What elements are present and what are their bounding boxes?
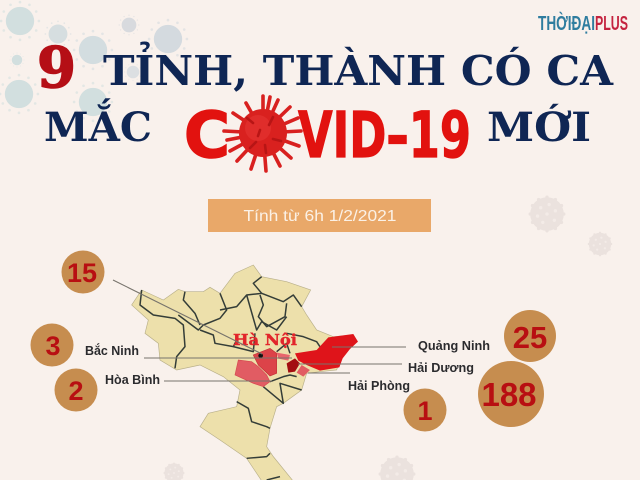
case count: 188: 188 — [481, 376, 537, 413]
logo: Thời Đại Plus: THỜIĐẠI — [538, 11, 595, 35]
title number 9: 9 — [37, 35, 76, 101]
letter C: C — [184, 99, 230, 172]
case count: 3: 3 — [45, 331, 61, 361]
map label: Hà Nội: Hà Nội — [233, 331, 297, 349]
icon: red virus as letter O — [224, 96, 301, 171]
province: Hà Nội — [253, 348, 277, 376]
case count: 1: 1 — [417, 396, 433, 426]
province: Bắc Ninh — [277, 353, 290, 361]
province borders — [140, 277, 320, 480]
province: Hòa Bình — [235, 360, 270, 387]
case count: 25 — [504, 310, 556, 362]
place labels: Bắc Ninh — [85, 343, 139, 358]
title line 1: TỈNH, THÀNH CÓ CA — [103, 42, 614, 95]
case count: 25: 25 — [513, 320, 547, 355]
leader lines — [113, 280, 406, 381]
place labels: Quảng Ninh — [418, 339, 490, 353]
case count: 15 — [62, 250, 104, 294]
case count: 2 — [54, 368, 98, 412]
background virus decoration: right and bottom — [163, 196, 612, 480]
marker: Hà Nội black dot — [258, 353, 263, 358]
case count: 1 — [404, 388, 446, 432]
place labels: Hòa Bình — [105, 373, 160, 387]
province: Hải Dương — [287, 358, 300, 373]
case count: 3 — [30, 324, 74, 366]
text VID-19: VID–19 — [298, 99, 471, 172]
place labels: Hải Dương — [408, 361, 474, 375]
title — [37, 35, 614, 151]
COVID-19 wordmark — [184, 96, 471, 172]
date banner — [208, 199, 431, 232]
title word MẮC: MẮC — [44, 99, 152, 151]
background virus decoration: top left — [0, 1, 188, 122]
date banner: Tính từ 6h 1/2/2021 — [244, 208, 396, 225]
title word MỚI: MỚI — [487, 104, 591, 151]
place labels — [85, 339, 490, 393]
case count: 188 — [478, 361, 544, 427]
case count: 2: 2 — [68, 376, 84, 406]
province: Hải Phòng — [297, 365, 310, 377]
map landmass — [132, 265, 357, 480]
place labels: Hải Phòng — [348, 379, 410, 393]
province: Quảng Ninh — [295, 334, 358, 371]
case count: 15: 15 — [67, 258, 97, 288]
map of northern Vietnam — [132, 265, 358, 480]
